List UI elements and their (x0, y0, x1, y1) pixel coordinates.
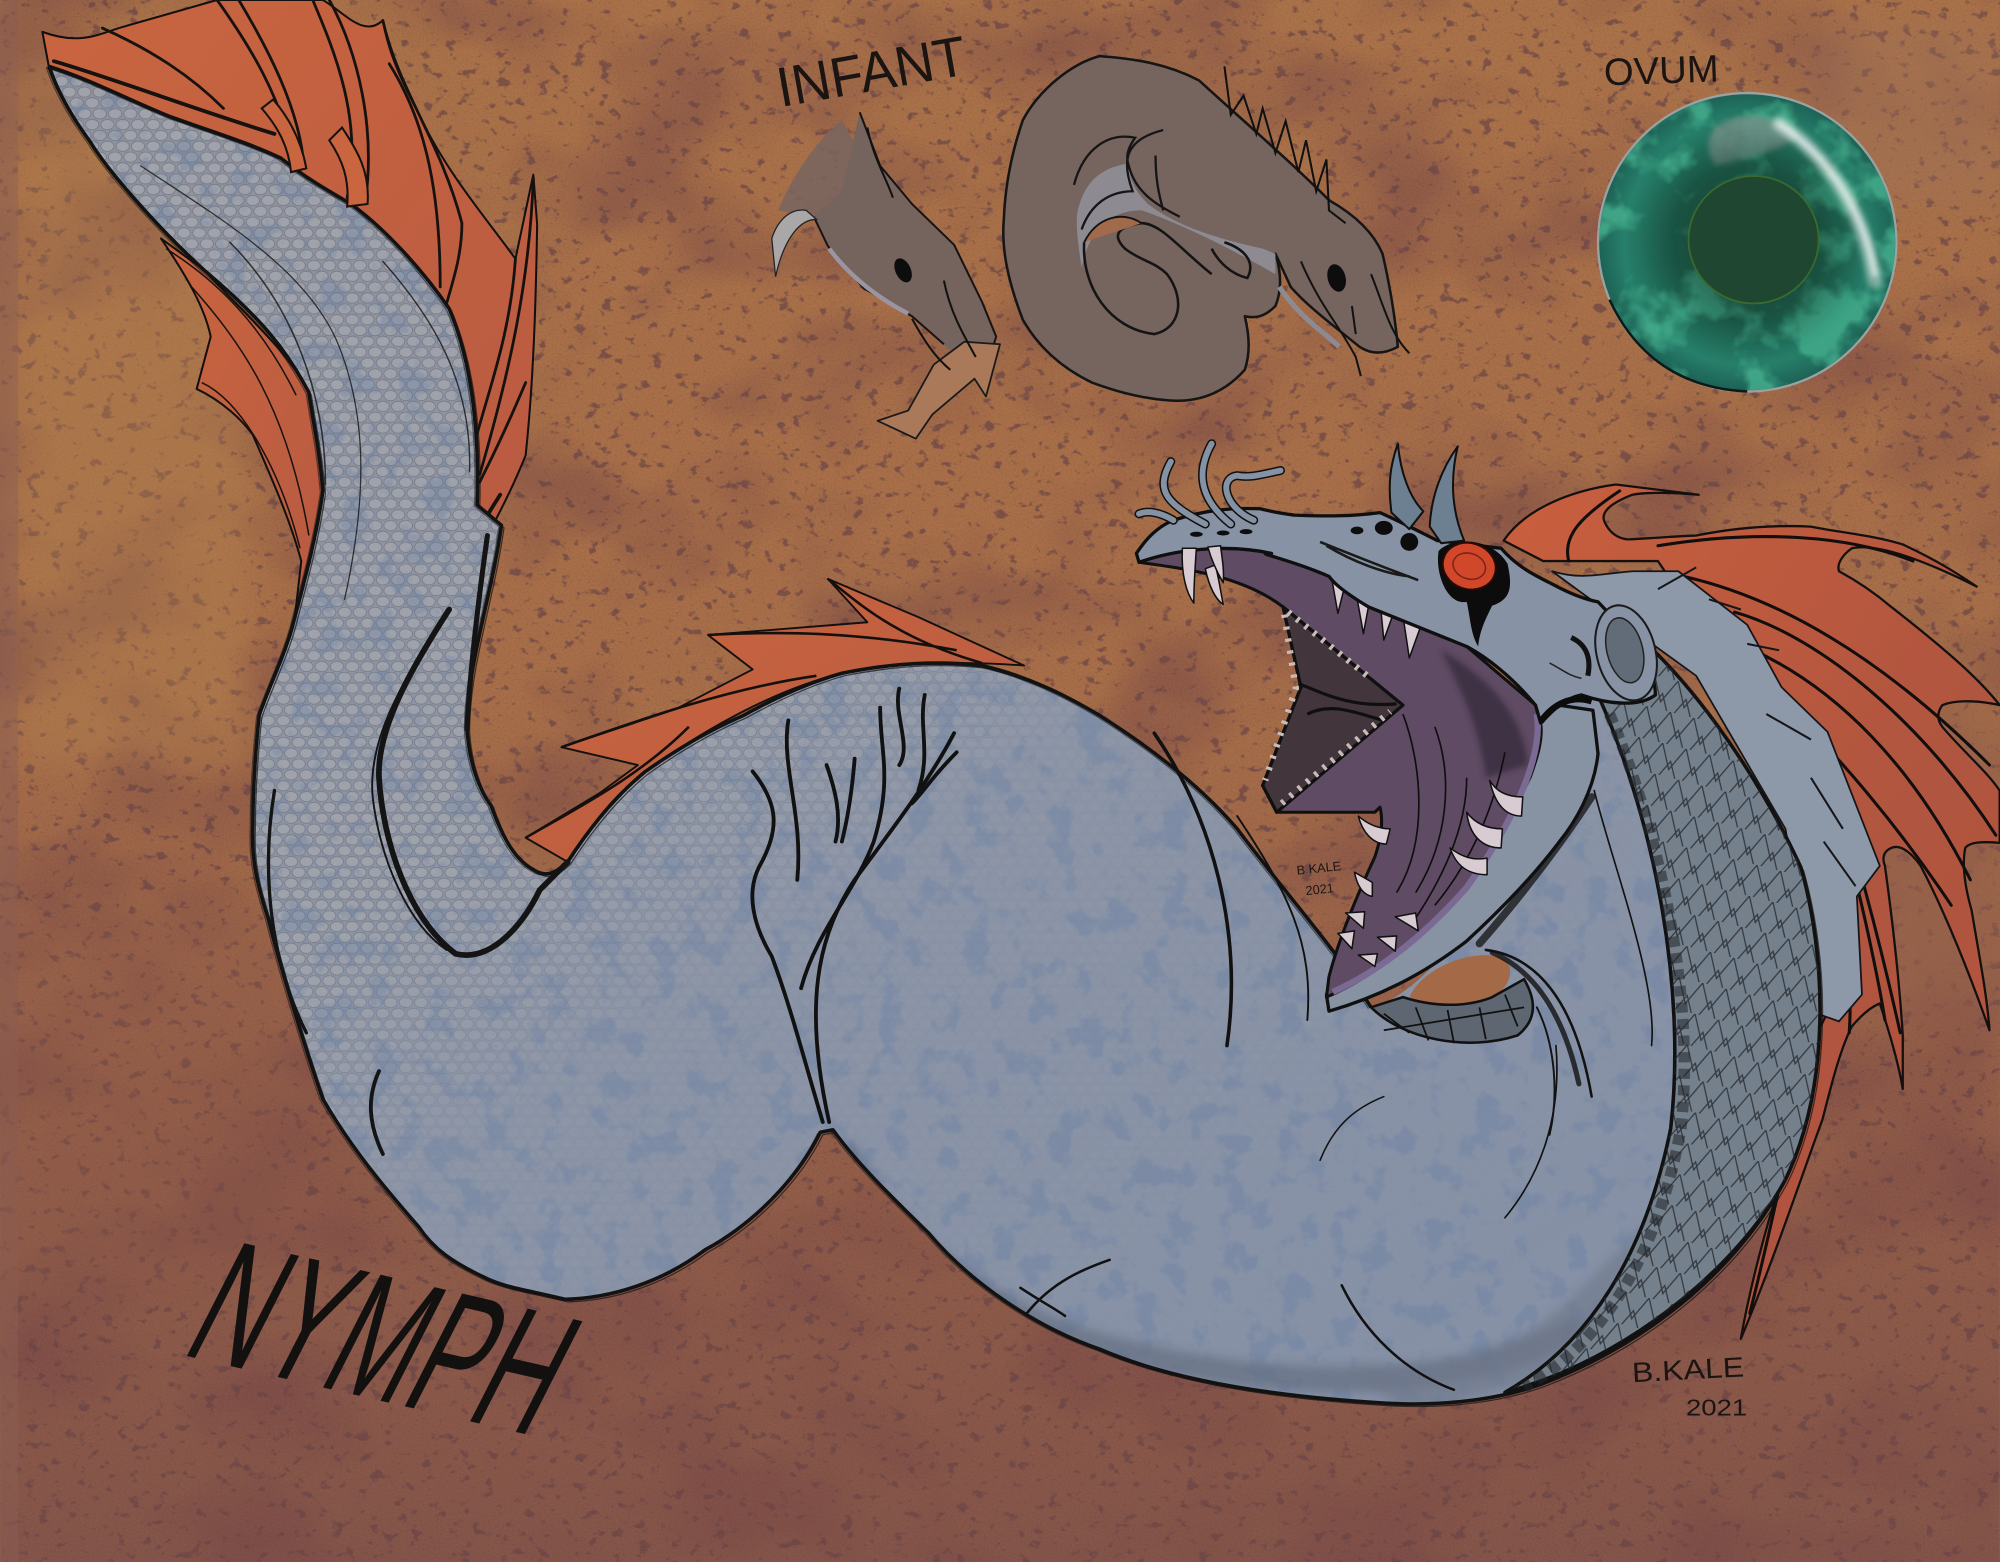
jaw hinge shadow (1541, 699, 1592, 722)
snout fangs (1182, 546, 1223, 604)
prey bone (878, 342, 1000, 439)
body folds (1020, 733, 1557, 1390)
infant: left hatchling with prey (772, 112, 1000, 439)
small signature on body: 2021 (1305, 880, 1335, 898)
palate teeth (1288, 612, 1367, 676)
neck: dark scaled band (1505, 609, 1820, 1392)
tail inner crease lines (141, 166, 568, 1154)
label: INFANT: INFANT (772, 24, 971, 119)
mane: pale fringe (1552, 567, 1880, 1021)
body: main serpentine form (46, 64, 1824, 1408)
label: OVUM: OVUM (1603, 47, 1719, 94)
ear (1586, 599, 1666, 707)
head: lower jaw (1326, 705, 1598, 1011)
icon: red eye (1438, 541, 1510, 646)
upper and lower teeth (1332, 578, 1523, 967)
head: mouth interior (1139, 548, 1541, 997)
signature: B. Kale 2021: 2021 (1686, 1394, 1747, 1420)
fin: back (526, 579, 1024, 862)
small signature on body: B KALE (1296, 858, 1342, 878)
small signature on body (1296, 858, 1342, 898)
title: NYMPH: NYMPH (161, 1207, 608, 1471)
fin: tail top (42, 0, 537, 617)
fin: tail underside (161, 238, 323, 617)
signature: B. Kale 2021: B.KALE (1631, 1351, 1745, 1388)
fin: head crest and mane fins (1504, 485, 2000, 1339)
body wrinkles (752, 689, 957, 1122)
signature: B. Kale 2021 (1631, 1351, 1747, 1420)
neck shadow tuft (1479, 791, 1652, 1135)
whiskers (1139, 444, 1281, 524)
tail fin ridges (262, 99, 368, 207)
infant: coiled hatchling (1003, 56, 1409, 401)
ovum: green egg (1594, 89, 1900, 395)
fin rays (54, 0, 533, 606)
horns (1390, 444, 1423, 529)
fin rays (1567, 491, 1996, 1313)
head: skull and snout (1136, 444, 1666, 723)
neck opening: background gap (1371, 955, 1533, 1043)
nostrils and dashes (1375, 521, 1393, 535)
